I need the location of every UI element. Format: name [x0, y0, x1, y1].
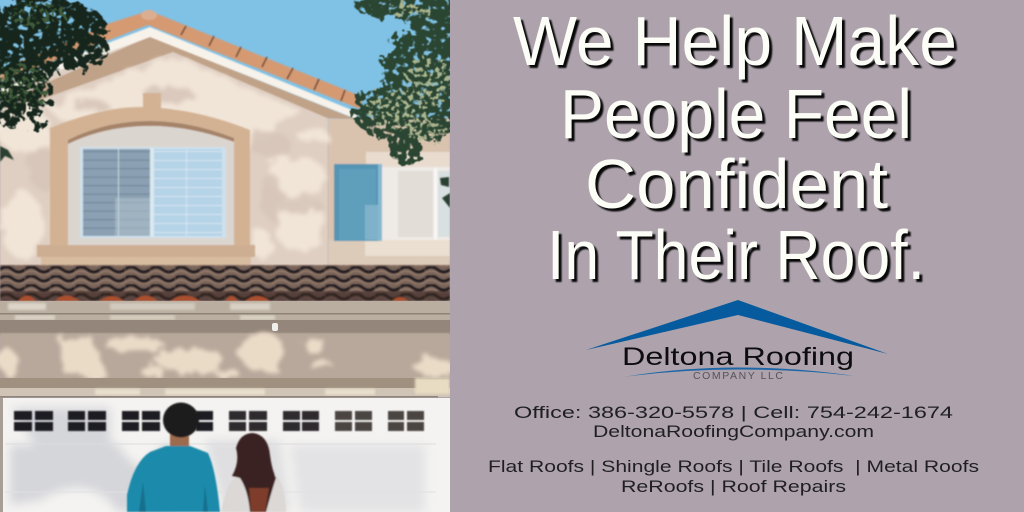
- headline text: [513, 2, 957, 294]
- tree foliage, top right: [352, 0, 467, 164]
- icon: blue roof: [586, 300, 888, 354]
- header trim: [0, 378, 450, 398]
- panel: house photo: [0, 0, 450, 512]
- headline shadow: Confident: [588, 148, 891, 226]
- headline text: We Help Make: [513, 2, 957, 80]
- window: right white shutters: [382, 167, 450, 240]
- services list: [488, 457, 979, 496]
- contact and services text: [488, 403, 979, 496]
- main gable wall: [0, 30, 356, 266]
- right wing of the house: [328, 118, 450, 267]
- headline text: In Their Roof.: [547, 216, 925, 294]
- dappled sunlight on wall: [0, 56, 326, 261]
- contact details: Office: 386-320-5578 | Cell: 754-242-1674: [514, 403, 953, 422]
- headline shadow: We Help Make: [516, 5, 960, 83]
- headline: [513, 2, 960, 297]
- man in teal shirt: [127, 402, 220, 512]
- contact details: [514, 403, 953, 441]
- security camera: [272, 323, 278, 331]
- arched window glass with blinds: [80, 147, 226, 238]
- lower roof tiles: [0, 265, 450, 301]
- stray leaves over window: [440, 177, 450, 208]
- tree shadow and sunlight on header: [0, 332, 453, 377]
- headline shadow: In Their Roof.: [550, 219, 928, 297]
- wall shade patches: [27, 87, 323, 217]
- services list: Flat Roofs | Shingle Roofs | Tile Roofs | Metal Roofs: [488, 457, 979, 476]
- logo: Deltona Roofing: [586, 300, 888, 382]
- gutter and soffit: [0, 301, 450, 335]
- sky: [0, 0, 450, 130]
- headline text: People Feel: [560, 75, 912, 153]
- shaded garage header wall: [0, 333, 450, 379]
- arched window surround: [37, 93, 255, 267]
- contact details: DeltonaRoofingCompany.com: [593, 422, 874, 441]
- woman with long hair: [221, 433, 286, 512]
- small left leaves: [0, 146, 14, 162]
- logo subtitle: COMPANY LLC: [693, 370, 783, 382]
- headline shadow: [516, 5, 960, 297]
- tree foliage, top left: [0, 0, 108, 132]
- logo wordmark: Deltona Roofing: [622, 343, 854, 371]
- services list: ReRoofs | Roof Repairs: [621, 477, 846, 496]
- headline text: Confident: [585, 145, 888, 223]
- blue shutter: [334, 164, 382, 241]
- white fascia board: [0, 27, 359, 119]
- garage door windows: [14, 411, 424, 431]
- garage door: [0, 398, 450, 512]
- logo swoosh: [623, 368, 854, 377]
- headline shadow: People Feel: [563, 78, 915, 156]
- ridge roof tiles: [0, 10, 363, 109]
